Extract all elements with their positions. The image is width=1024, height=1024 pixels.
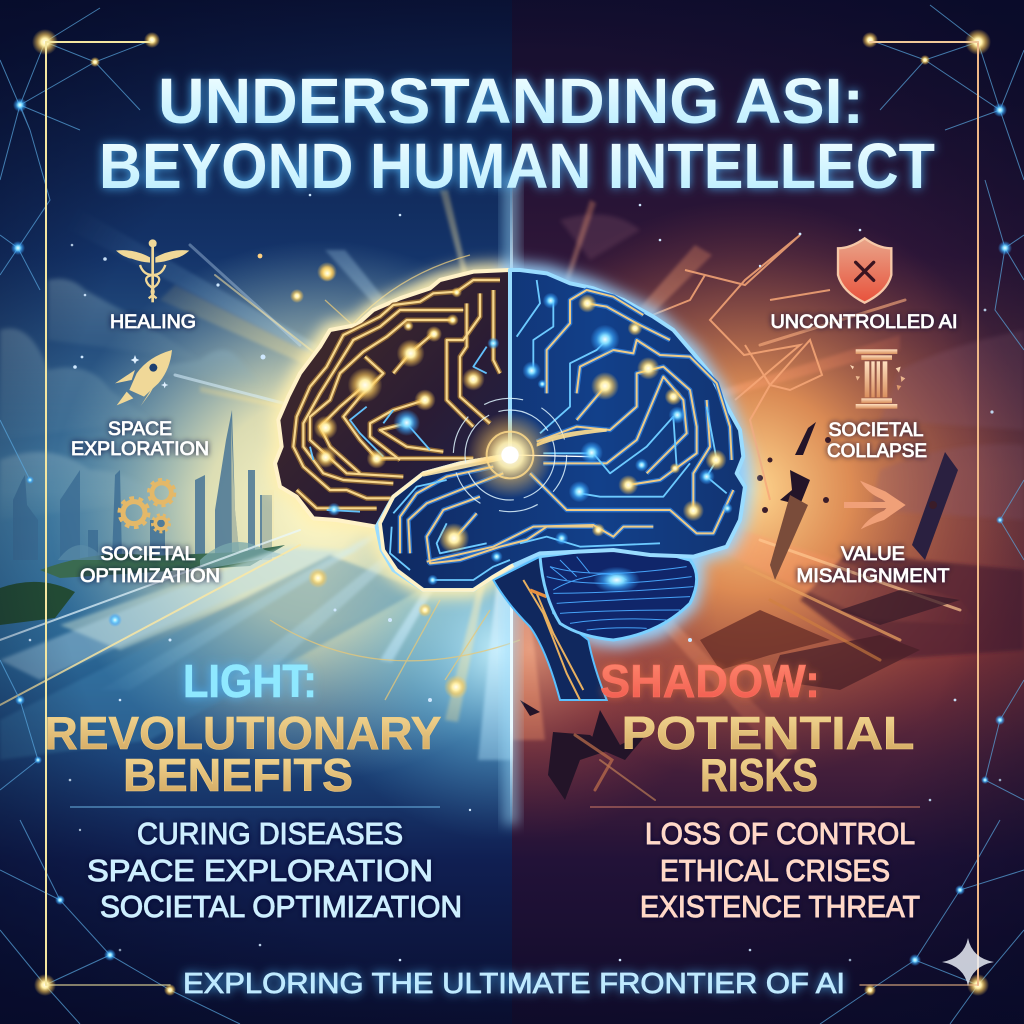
left hemisphere gold (275, 270, 510, 527)
list: risks (640, 816, 920, 924)
list: benefits (87, 816, 462, 924)
icon: gears (119, 480, 175, 532)
central core rings (420, 398, 607, 512)
icon: shield with x (838, 238, 891, 303)
label: space exploration: EXPLORATION (71, 439, 209, 460)
label: uncontrolled ai: UNCONTROLLED AI (770, 312, 958, 333)
title: UNDERSTANDING ASI: (158, 65, 864, 137)
icon: misaligned arrow (844, 481, 906, 529)
divider light (70, 806, 440, 808)
icon: caduceus (116, 239, 189, 302)
stars (29, 194, 1001, 961)
label: societal optimization (80, 544, 220, 587)
gold orbit lines left (270, 255, 520, 700)
light road (0, 545, 420, 760)
clouds right (560, 214, 1024, 520)
heading: light: LIGHT: (183, 655, 317, 707)
clouds left (0, 279, 262, 520)
gold glowing dots (290, 262, 468, 699)
light beams (30, 190, 980, 760)
list: risks: EXISTENCE THREAT (640, 889, 920, 924)
heading: revolutionary benefits: REVOLUTIONARY (44, 707, 442, 759)
label: space exploration (71, 419, 209, 460)
label: space exploration: SPACE (108, 419, 172, 440)
brain nodes (314, 265, 733, 585)
label: societal optimization: SOCIETAL (100, 544, 196, 565)
label: value misalignment: MISALIGNMENT (796, 566, 950, 587)
brain halo (275, 270, 745, 640)
heading: potential risks: POTENTIAL (622, 707, 914, 759)
list: benefits: SOCIETAL OPTIMIZATION (100, 889, 462, 924)
panel: shadow risks (590, 655, 920, 924)
debris right (520, 422, 960, 800)
right mountains (800, 550, 1024, 660)
label: value misalignment: VALUE (841, 544, 905, 565)
icon column: risks (770, 238, 958, 587)
label: societal collapse (827, 420, 927, 462)
green hills (0, 542, 285, 625)
brain (275, 265, 745, 700)
temporal and right hemisphere (377, 270, 745, 590)
divider shadow (590, 806, 920, 808)
heading: potential risks: RISKS (700, 749, 818, 801)
label: societal collapse: SOCIETAL (828, 420, 924, 441)
heading: revolutionary benefits (44, 707, 442, 801)
city skyline (13, 410, 272, 560)
title: BEYOND HUMAN INTELLECT (99, 130, 935, 202)
list: risks: LOSS OF CONTROL (645, 816, 915, 851)
heading: revolutionary benefits: BENEFITS (123, 749, 353, 801)
list: benefits: CURING DISEASES (137, 816, 403, 851)
label: value misalignment (796, 544, 950, 587)
fine beam streaks left (0, 245, 960, 705)
heading: shadow: SHADOW: (600, 655, 820, 707)
title (99, 65, 935, 202)
heading: potential risks (622, 707, 914, 801)
label: societal optimization: OPTIMIZATION (80, 566, 220, 587)
footer tagline: EXPLORING THE ULTIMATE FRONTIER OF AI (183, 968, 845, 1000)
list: benefits: SPACE EXPLORATION (87, 853, 433, 888)
crossed planks right (575, 567, 900, 800)
icon column: benefits (71, 239, 220, 587)
icon: sparkle mark (942, 938, 994, 986)
orange crack lines (640, 235, 830, 500)
icon: rocket (115, 350, 172, 406)
central divider line (503, 175, 519, 825)
icon: broken column (850, 349, 905, 409)
panel: light benefits (44, 655, 462, 924)
list: risks: ETHICAL CRISES (660, 853, 890, 888)
label: societal collapse: COLLAPSE (827, 441, 927, 462)
brainstem (493, 557, 607, 700)
cerebellum (540, 549, 697, 640)
label: healing: HEALING (110, 312, 196, 333)
